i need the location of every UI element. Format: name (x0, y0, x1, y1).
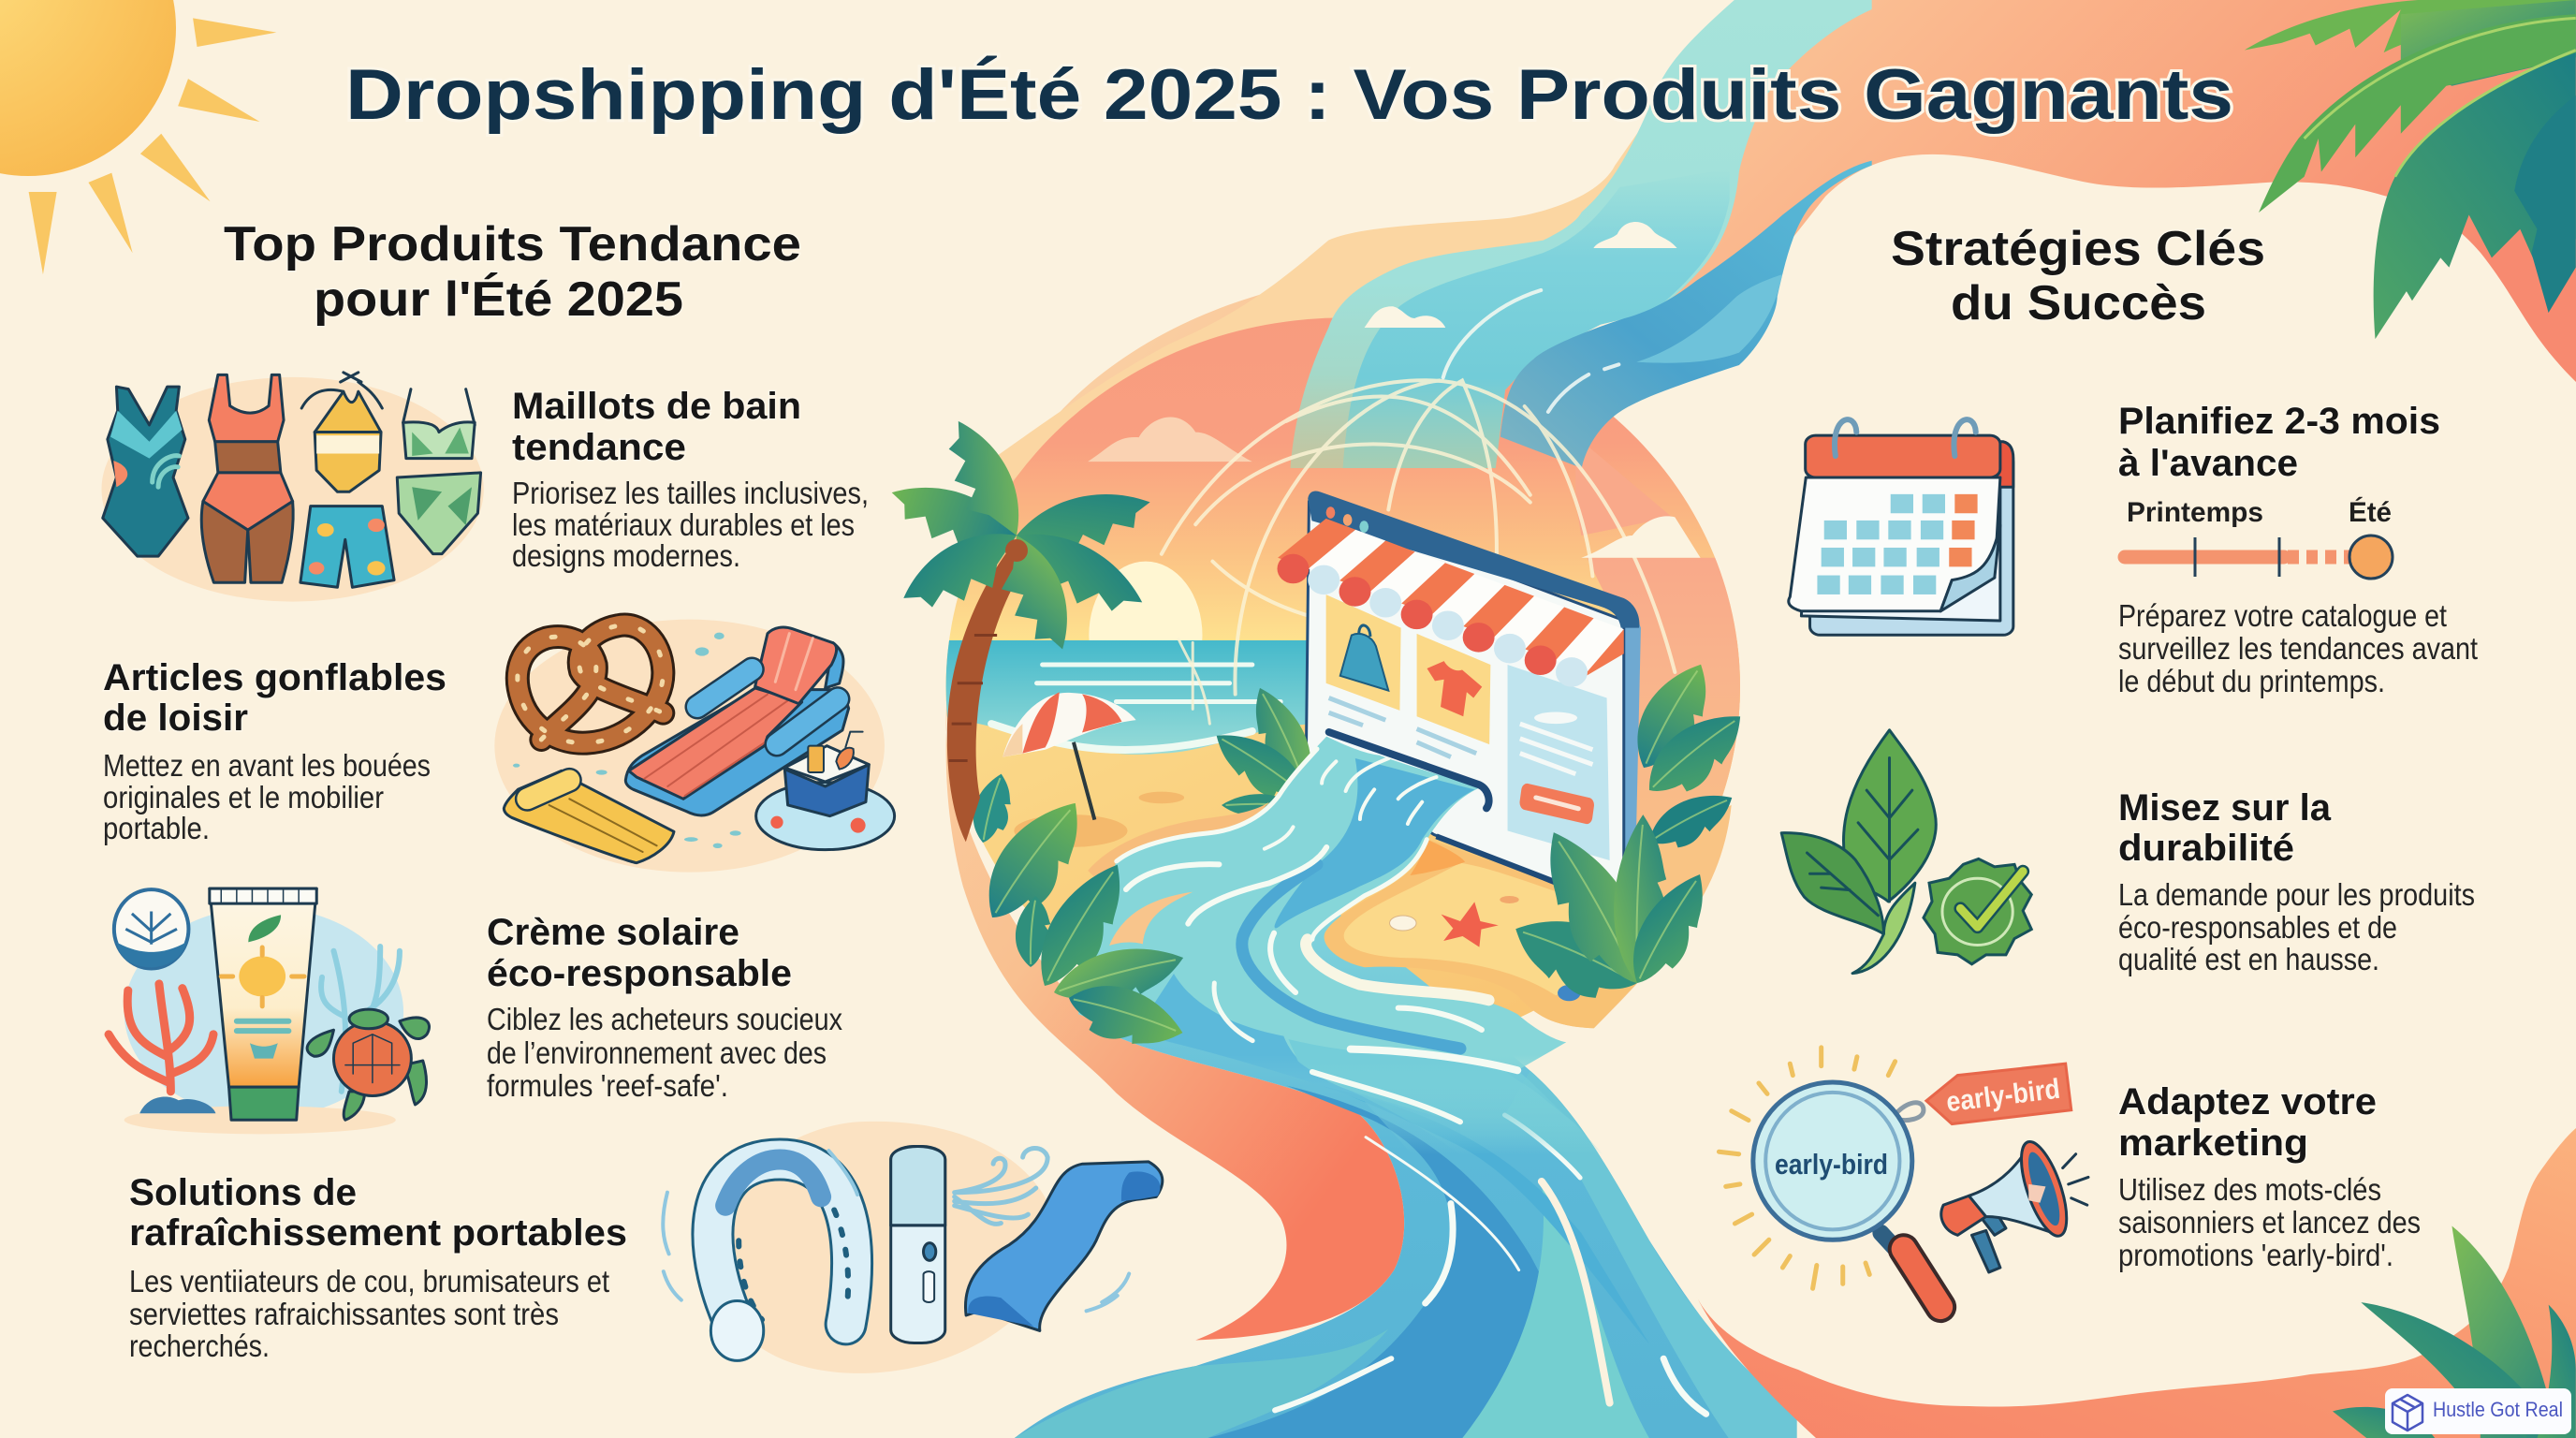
text: maillots de bain: Priorisez les tailles inclusives, (512, 476, 869, 510)
neck fan (663, 1151, 857, 1337)
lower river (1014, 864, 1797, 1438)
icon: cooling products (663, 1122, 1163, 1373)
text: misez sur la durabilite: Misez sur la (2118, 787, 2332, 829)
text: articles gonflables: de loisir (103, 697, 248, 739)
back leaves behind the waterfall (1204, 679, 1325, 817)
product card shirt (1417, 634, 1490, 757)
peach band rising to the top stream (980, 131, 1648, 487)
text: misez sur la durabilite: La demande pour les produits (2118, 877, 2475, 912)
text: articles gonflables (103, 657, 446, 845)
text: articles gonflables: Articles gonflables (103, 657, 446, 698)
text: adaptez votre marketing: saisonniers et lancez des (2118, 1205, 2421, 1240)
text: maillots de bain: Maillots de bain (512, 386, 801, 427)
cooler float (756, 732, 895, 850)
text: articles gonflables: portable. (103, 811, 210, 845)
text: articles gonflables: Mettez en avant les bouées (103, 748, 431, 783)
text: creme solaire: éco-responsable (487, 953, 792, 994)
salmon wave bottom right (1696, 1128, 2576, 1438)
cooling towel (965, 1162, 1163, 1330)
icon: magnifier with tag and megaphone: early-bird (1775, 1148, 1888, 1181)
text: adaptez votre marketing: marketing (2118, 1123, 2308, 1164)
sun top left (0, 0, 276, 274)
text: misez sur la durabilite: qualité est en hausse. (2118, 942, 2379, 976)
text: preparez: Préparez votre catalogue et (2118, 598, 2447, 633)
text: preparez: le début du printemps. (2118, 664, 2385, 698)
text: planifiez (2118, 401, 2440, 484)
palm leaves bottom right (2333, 1225, 2576, 1438)
text: adaptez votre marketing: Adaptez votre (2118, 1081, 2377, 1123)
brand badge: Hustle Got Real (2433, 1398, 2563, 1421)
waterfall flowing out of the store (1078, 732, 1603, 1154)
central scene background: sky, sun, sea, sand (945, 318, 1740, 1017)
icon: magnifier with tag and megaphone: early-bird (1945, 1074, 2062, 1118)
river upper: teal stream (1290, 0, 1872, 468)
timeline printemps to ete: Printemps (2127, 497, 2263, 528)
text: solutions de rafraichissement: recherchés. (129, 1328, 270, 1363)
icon: swimsuits (101, 373, 484, 602)
right heading: strategies (1891, 222, 2265, 330)
left heading: top produits: pour l'Été 2025 (314, 272, 683, 327)
palm fronds top right (2245, 0, 2576, 339)
icon: leaves with check badge (1781, 730, 2031, 974)
palm tree and beach umbrella (881, 411, 1158, 842)
yellow float (504, 770, 674, 863)
text: preparez: surveillez les tendances avant (2118, 631, 2478, 666)
text: creme solaire (487, 912, 842, 1103)
text: creme solaire: Ciblez les acheteurs soucieux (487, 1002, 842, 1036)
icon: inflatables (494, 620, 895, 873)
title: Dropshipping d'Été 2025 : Vos Produits Gagnants (345, 55, 2233, 135)
peach swoosh around the scene (946, 281, 1404, 1340)
icon: magnifier with tag and megaphone (1719, 1048, 2088, 1307)
text: planifiez: à l'avance (2118, 443, 2298, 484)
text: solutions de rafraichissement: rafraîchissement portables (129, 1212, 627, 1254)
text: preparez (2118, 598, 2478, 698)
river upper: blue stream (1500, 161, 1872, 468)
scene foliage: leaves around the river and store (966, 652, 1758, 1059)
icon: calendar (1789, 419, 2013, 635)
icon: cube logo (2393, 1395, 2422, 1431)
text: solutions de rafraichissement (129, 1172, 627, 1363)
product card bag (1326, 594, 1401, 726)
lounger (625, 627, 849, 815)
sand island with starfish and shell (1325, 805, 1732, 1028)
text: solutions de rafraichissement: Les ventiiateurs de cou, brumisateurs et (129, 1264, 609, 1299)
text: maillots de bain: designs modernes. (512, 538, 740, 573)
text: adaptez votre marketing: Utilisez des mots-clés (2118, 1172, 2381, 1207)
salmon wave top right (1638, 0, 2576, 382)
text: solutions de rafraichissement: serviettes rafraichissantes sont très (129, 1297, 559, 1331)
text: misez sur la durabilite: durabilité (2118, 828, 2294, 869)
text: misez sur la durabilite (2118, 787, 2475, 976)
right sky cloud (1581, 516, 1701, 558)
text: creme solaire: de l’environnement avec des (487, 1035, 827, 1070)
text: maillots de bain: tendance (512, 427, 686, 468)
timeline printemps to ete (2125, 496, 2393, 579)
text: adaptez votre marketing: promotions 'early-bird'. (2118, 1238, 2393, 1272)
left heading: top produits (224, 217, 801, 327)
left heading: top produits: Top Produits Tendance (224, 217, 801, 271)
text: creme solaire: formules 'reef-safe'. (487, 1068, 728, 1103)
pretzel float (518, 625, 663, 743)
awning (1278, 519, 1624, 687)
promo panel (1508, 665, 1610, 860)
text: planifiez: Planifiez 2-3 mois (2118, 401, 2440, 442)
text: solutions de rafraichissement: Solutions de (129, 1172, 357, 1213)
online store window with awning (1278, 492, 1641, 897)
text: maillots de bain: les matériaux durables et les (512, 507, 855, 542)
timeline printemps to ete: Été (2349, 496, 2392, 528)
mist bottle (891, 1146, 945, 1343)
icon: eco sunscreen (109, 888, 430, 1134)
globe lines (1162, 380, 1675, 724)
text: adaptez votre marketing (2118, 1081, 2421, 1272)
text: articles gonflables: originales et le mobilier (103, 780, 384, 814)
brand badge (2385, 1388, 2571, 1434)
text: misez sur la durabilite: éco-responsables et de (2118, 910, 2397, 945)
text: maillots de bain (512, 386, 869, 573)
right heading: strategies: Stratégies Clés (1891, 222, 2265, 276)
right heading: strategies: du Succès (1951, 276, 2206, 330)
text: creme solaire: Crème solaire (487, 912, 739, 953)
